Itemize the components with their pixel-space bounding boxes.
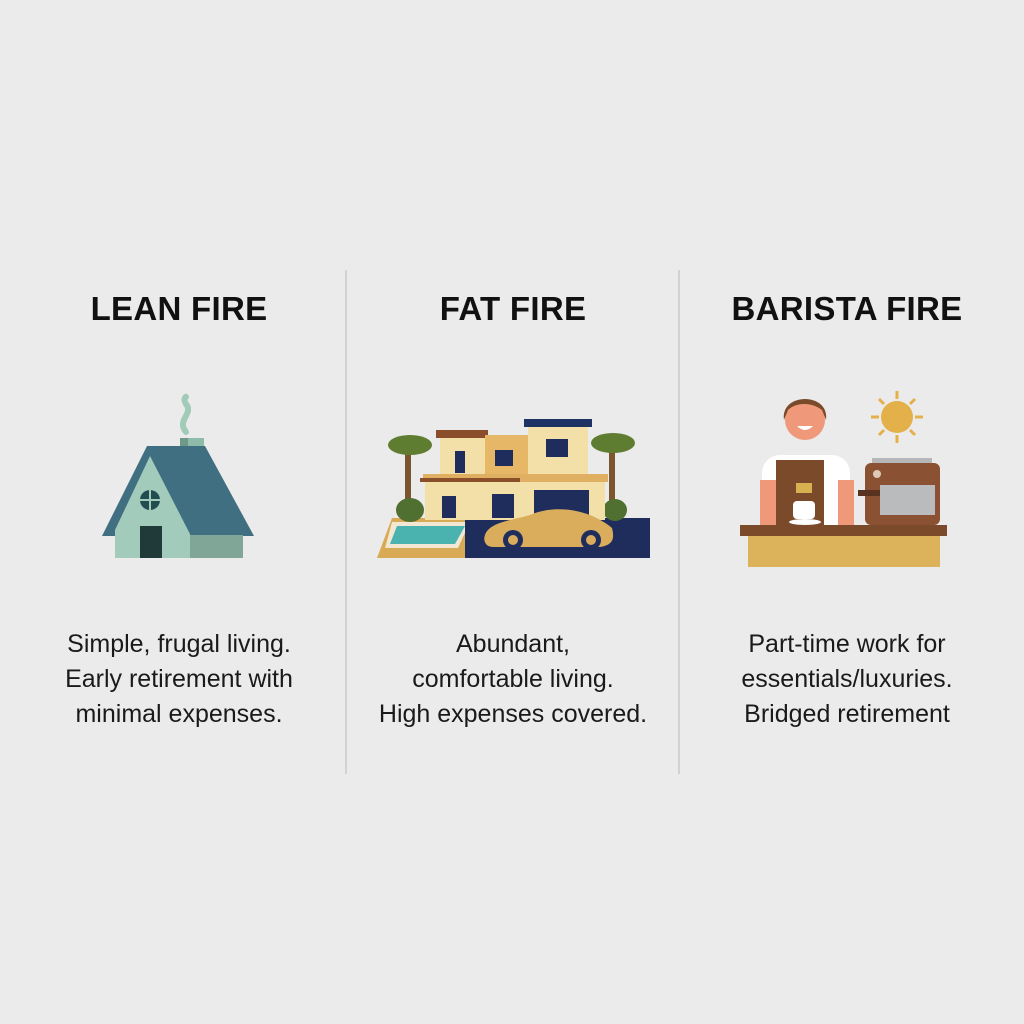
text: barista description	[741, 630, 953, 728]
title: barista fire: BARISTA FIRE	[732, 290, 962, 327]
text: barista description: essentials/luxuries.	[741, 665, 953, 693]
text: fat description: Abundant,	[456, 630, 570, 658]
title: lean fire: LEAN FIRE	[91, 290, 267, 327]
text: lean description: Simple, frugal living.	[67, 630, 291, 658]
icon: small house	[102, 397, 254, 558]
text: lean description: minimal expenses.	[75, 700, 283, 728]
icon: barista with coffee machine	[740, 391, 947, 567]
text: fat description	[379, 630, 647, 728]
text: barista description: Part-time work for	[748, 630, 946, 658]
text: fat description: comfortable living.	[412, 665, 614, 693]
text: fat description: High expenses covered.	[379, 700, 647, 728]
text: lean description	[65, 630, 293, 728]
title: fat fire: FAT FIRE	[440, 290, 586, 327]
text: barista description: Bridged retirement	[744, 700, 950, 728]
icon: mansion with car and pool	[377, 419, 650, 558]
text: lean description: Early retirement with	[65, 665, 293, 693]
